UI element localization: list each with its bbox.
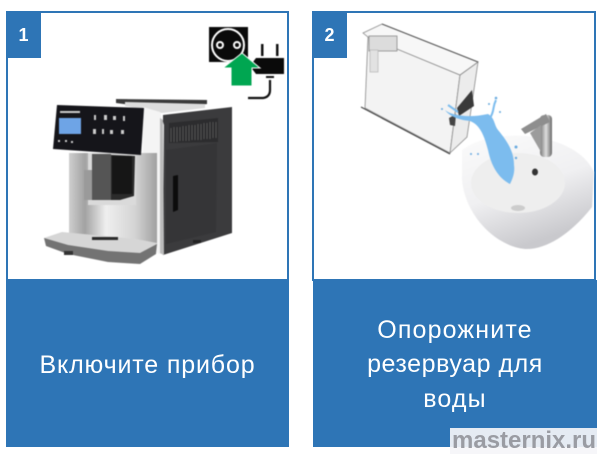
- illustration: sink with faucet: [462, 114, 594, 249]
- caption: step 2: резервуар для: [367, 350, 543, 378]
- icon: green arrow: [223, 53, 260, 86]
- caption: step 2: Опорожните: [377, 316, 533, 344]
- caption: step 1: Включите прибор: [40, 351, 255, 379]
- caption: step 2: [313, 280, 597, 447]
- caption: step 1: [6, 280, 289, 447]
- panel: step 2 frame: [312, 11, 596, 281]
- badge: number 2: [312, 12, 347, 58]
- illustration: water tank: [361, 24, 478, 154]
- badge: number 1: [6, 12, 41, 58]
- icon: power socket and plug: [209, 27, 284, 98]
- illustration: water splash: [441, 90, 518, 184]
- badge: number 1: 1: [18, 24, 28, 44]
- illustration: coffee machine: [44, 99, 232, 264]
- panel: step 1 frame: [6, 11, 289, 281]
- caption: step 2: воды: [423, 385, 487, 413]
- badge: number 2: 2: [324, 24, 334, 44]
